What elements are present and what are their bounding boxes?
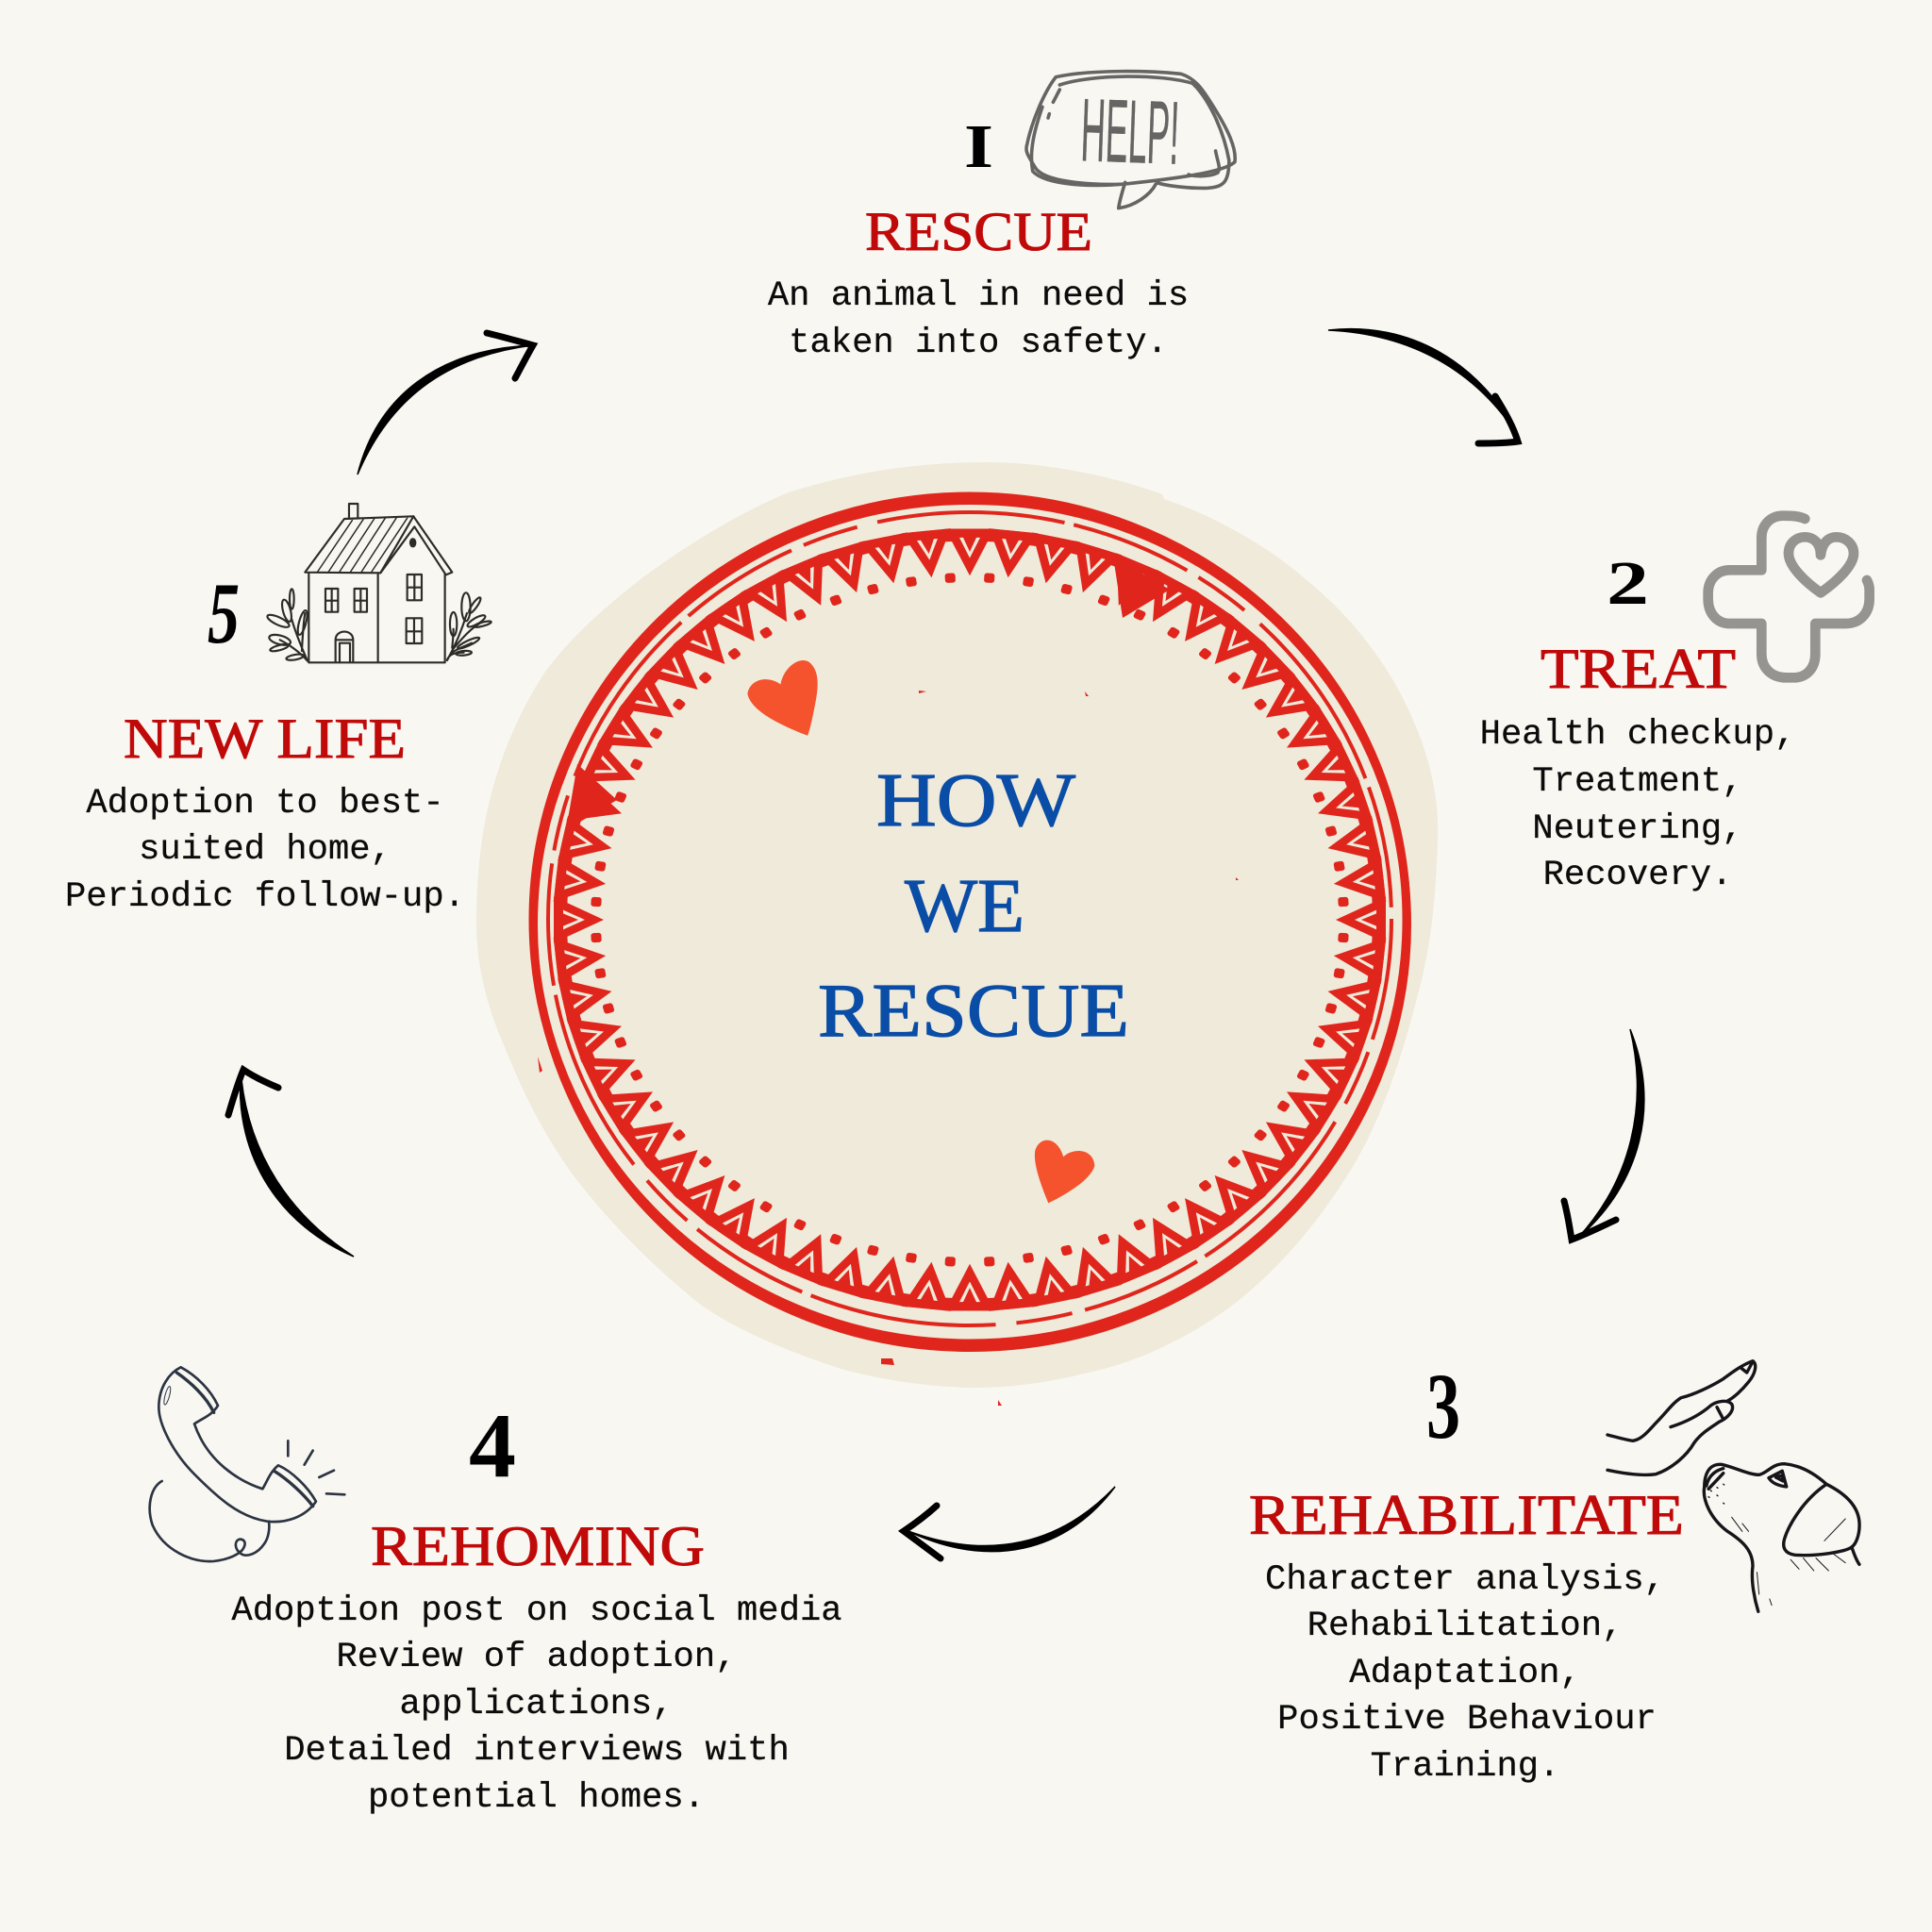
- outer ring stroke: [533, 496, 1407, 1348]
- number 2: 2: [1607, 549, 1649, 618]
- text: rehabilitate description: Training.: [1371, 1747, 1559, 1787]
- arrow 5 to rescue: [358, 333, 533, 475]
- text: rehoming description: [231, 1591, 842, 1818]
- arrow 1 to treat: [1328, 329, 1520, 443]
- heading: rescue: RESCUE: [865, 201, 1092, 262]
- number 5: 5: [208, 565, 240, 661]
- number 1: I: [964, 112, 993, 181]
- text: new life description: [65, 784, 465, 917]
- text: treat description: Neutering,: [1532, 809, 1743, 849]
- text: new life description: suited home,: [139, 830, 391, 870]
- text: rehabilitate description: Rehabilitation,: [1307, 1607, 1623, 1646]
- text: treat description: [1480, 715, 1795, 895]
- heading: rehoming: REHOMING: [371, 1515, 705, 1577]
- text: rehabilitate description: Character analysis,: [1265, 1560, 1665, 1600]
- text: rehoming description: applications,: [399, 1685, 674, 1724]
- heading: treat: TREAT: [1541, 638, 1736, 700]
- hand: [1607, 1361, 1756, 1474]
- centre title: HOW: [876, 759, 1076, 842]
- text: rescue description: taken into safety.: [789, 324, 1168, 363]
- centre title: [818, 759, 1129, 1053]
- red stamp ring: [513, 491, 1426, 1406]
- heading: rehabilitate: REHABILITATE: [1249, 1484, 1684, 1546]
- dots inside band: [553, 539, 1387, 1301]
- text: rehoming description: Adoption post on social media: [231, 1591, 842, 1631]
- text: HELP!: [1079, 80, 1181, 184]
- centre title: WE: [905, 865, 1024, 948]
- text: rehoming description: Detailed interviews with: [284, 1731, 790, 1771]
- heart bottom right: [1035, 1141, 1094, 1203]
- text: rehoming description: Review of adoption,: [336, 1638, 737, 1677]
- centre title: RESCUE: [818, 970, 1129, 1053]
- text: rehabilitate description: [1265, 1560, 1665, 1787]
- text: new life description: Periodic follow-up.: [65, 877, 465, 917]
- text: rehabilitate description: Positive Behaviour: [1277, 1700, 1657, 1740]
- text: rescue description: An animal in need is: [768, 276, 1189, 316]
- heart top left: [747, 660, 818, 736]
- zigzag band: [513, 491, 1426, 1349]
- text: treat description: Recovery.: [1543, 856, 1732, 895]
- text: rehabilitate description: Adaptation,: [1349, 1654, 1581, 1693]
- dog: [1704, 1464, 1859, 1611]
- text: new life description: Adoption to best-: [86, 784, 444, 824]
- icon: help speech bubble: [1026, 72, 1235, 208]
- cream blob behind the stamp: [476, 462, 1438, 1388]
- arrow 4 to new life: [228, 1070, 354, 1257]
- number 4: 4: [469, 1395, 516, 1497]
- arrow 3 to rehoming: [904, 1487, 1115, 1558]
- text: treat description: Health checkup,: [1480, 715, 1795, 755]
- text: rehoming description: potential homes.: [368, 1778, 705, 1818]
- heading: new life: NEW LIFE: [124, 708, 406, 770]
- arrow 2 to rehabilitate: [1564, 1029, 1644, 1240]
- icon: medical cross with heart: [1708, 516, 1870, 677]
- icon: hand and dog: [1607, 1361, 1859, 1611]
- icon: house with plants: [266, 504, 491, 662]
- icon: telephone: [150, 1367, 344, 1561]
- number 3: 3: [1426, 1354, 1460, 1458]
- text: rescue description: [768, 276, 1189, 363]
- text: treat description: Treatment,: [1532, 762, 1743, 802]
